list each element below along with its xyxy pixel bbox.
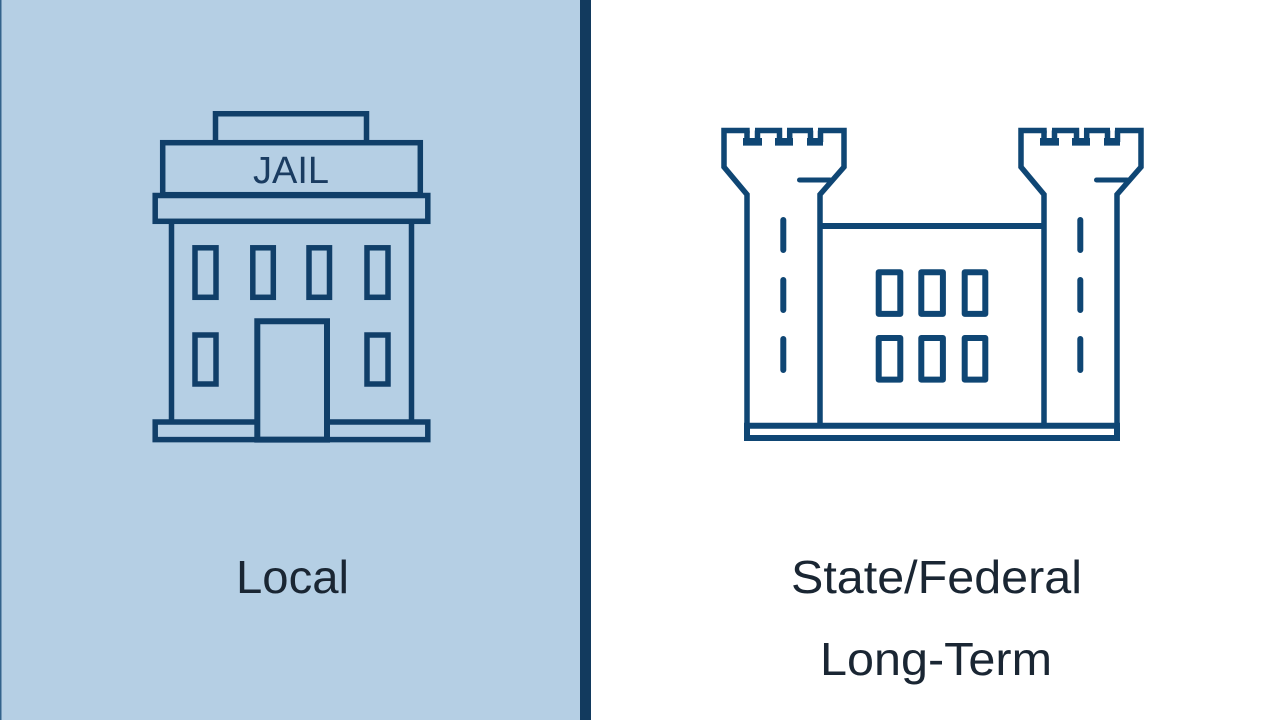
icon: state/federal castle prison (724, 130, 1141, 438)
tower ledge (800, 178, 830, 182)
tower ledge (1096, 178, 1127, 182)
panel edge: left border (0, 0, 2, 720)
lower windows (195, 335, 388, 384)
label: local: Local (236, 551, 349, 603)
sign block (163, 143, 420, 195)
building walls (172, 221, 412, 421)
label: long-term: Long-Term (820, 633, 1052, 685)
door (257, 321, 327, 440)
label: state/federal: State/Federal (791, 551, 1082, 603)
panel: local background (0, 0, 581, 720)
arrow slits (780, 220, 786, 370)
icon: local jail building (155, 114, 428, 440)
arrow slits (1077, 220, 1083, 370)
merlon bars (743, 138, 823, 146)
right tower (1021, 130, 1141, 426)
castle base (747, 426, 1117, 438)
castle windows (879, 272, 985, 380)
tower outline (724, 130, 844, 426)
jail sign label: JAIL (253, 150, 329, 192)
base step (155, 422, 428, 440)
battlements (747, 130, 820, 142)
upper windows (195, 248, 388, 297)
merlon bars (1040, 138, 1120, 146)
roof cap (216, 114, 366, 141)
tower outline (1021, 130, 1141, 426)
cornice band (155, 196, 428, 221)
curtain wall top (820, 223, 1044, 229)
left tower (724, 130, 844, 426)
panel: state/federal background (591, 0, 1280, 720)
center divider (580, 0, 591, 720)
battlements (1044, 130, 1118, 142)
